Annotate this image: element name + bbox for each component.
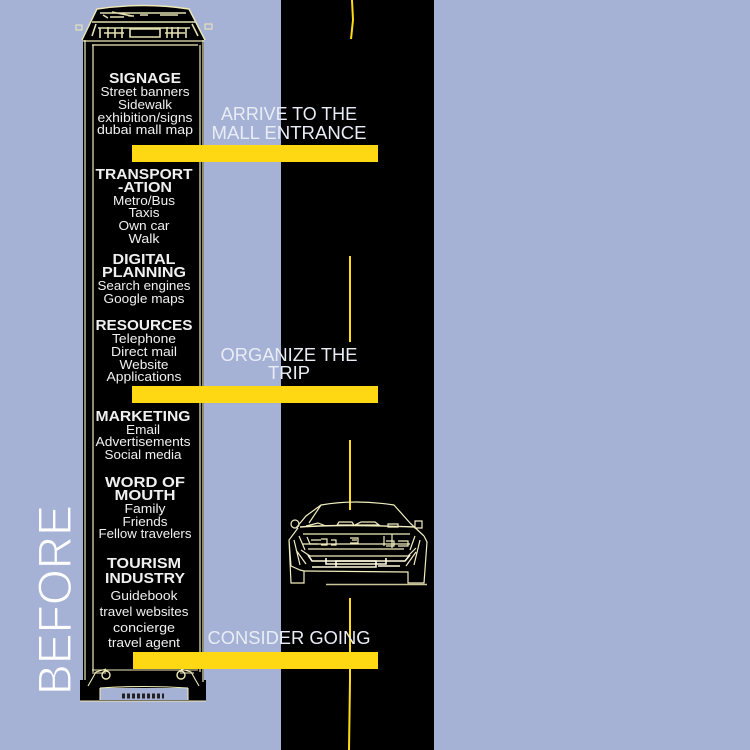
panel: word of mouth text (98, 474, 192, 541)
panel: word of mouth text: Friends (122, 514, 168, 529)
panel: signage text: Street banners (100, 84, 190, 99)
panel: marketing text: MARKETING (96, 408, 190, 425)
panel: transportation text: TRANSPORT (96, 166, 192, 183)
panel: tourism industry text: INDUSTRY (105, 570, 185, 587)
panel: transportation text: Metro/Bus (113, 193, 176, 208)
panel: signage text: dubai mall map (97, 122, 193, 137)
panel: tourism industry text: Guidebook (110, 588, 178, 603)
panel: digital planning text (98, 251, 191, 306)
panel: tourism industry text: travel websites (100, 604, 189, 619)
panel: digital planning text: Search engines (98, 278, 191, 293)
panel: resources text: Direct mail (111, 344, 177, 359)
bar: organize (132, 386, 378, 403)
panel: word of mouth text: MOUTH (114, 487, 176, 504)
title: before: BEFORE (28, 505, 81, 695)
panel: tourism industry text (100, 555, 189, 650)
icon: car front view (289, 502, 427, 584)
panel: digital planning text: DIGITAL (112, 251, 176, 268)
panel: marketing text: Advertisements (96, 434, 191, 449)
panel: transportation text: Own car (118, 218, 170, 233)
panel: transportation text: Taxis (128, 205, 160, 220)
panel: signage text (97, 70, 193, 137)
heading: organize the trip: TRIP (268, 363, 310, 383)
panel: word of mouth text: Fellow travelers (98, 526, 192, 541)
panel: digital planning text: PLANNING (102, 264, 186, 281)
heading: arrive to the mall entrance (212, 104, 366, 143)
panel: tourism industry text: travel agent (108, 635, 180, 650)
panel: marketing text: Social media (104, 447, 182, 462)
road (281, 0, 434, 750)
heading: arrive to the mall entrance: ARRIVE TO THE (221, 104, 357, 124)
panel: digital planning text: Google maps (104, 291, 185, 306)
panel: signage text: SIGNAGE (109, 70, 181, 87)
panel: resources text: Website (120, 357, 168, 372)
panel: resources text: Applications (106, 369, 182, 384)
heading: arrive to the mall entrance: MALL ENTRANCE (212, 123, 366, 143)
panel: transportation text: -ATION (118, 179, 172, 196)
panel: word of mouth text: WORD OF (105, 474, 185, 491)
bus (76, 6, 212, 701)
panel: tourism industry text: TOURISM (107, 555, 181, 572)
panel: tourism industry text: concierge (113, 620, 175, 635)
panel: transportation text: Walk (128, 231, 160, 246)
panel: transportation text (96, 166, 192, 246)
panel: signage text: Sidewalk (118, 97, 173, 112)
heading: organize the trip (220, 345, 358, 383)
panel: marketing text (96, 408, 191, 462)
panel: resources text: RESOURCES (96, 317, 192, 334)
heading: organize the trip: ORGANIZE THE (220, 345, 358, 365)
bar: consider (133, 652, 378, 669)
panel: resources text: Telephone (112, 331, 176, 346)
panel: signage text: exhibition/signs (98, 110, 193, 125)
panel: marketing text: Email (126, 422, 160, 437)
panel: resources text (96, 317, 192, 384)
bar: arrive (132, 145, 378, 162)
heading: consider going: CONSIDER GOING (208, 628, 370, 648)
panel: word of mouth text: Family (124, 501, 166, 516)
